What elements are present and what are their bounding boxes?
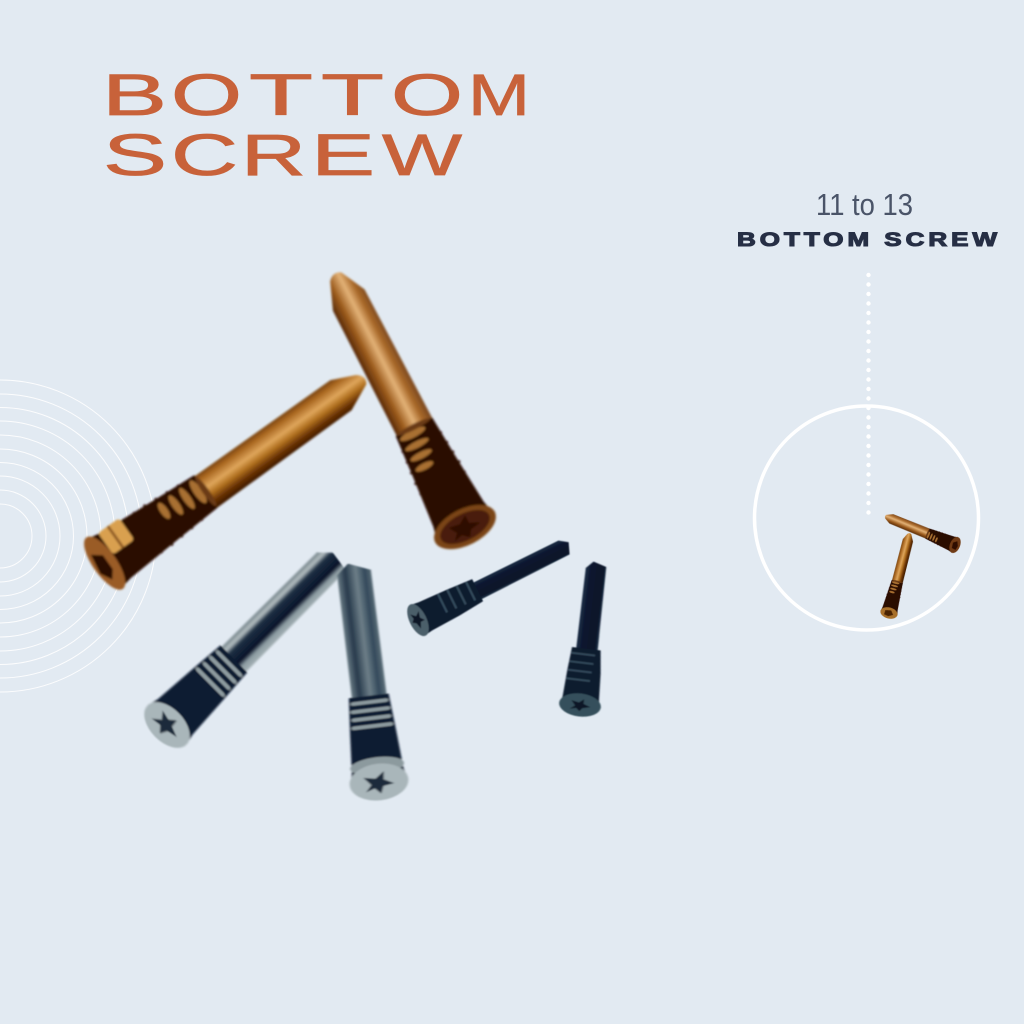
white circle callout xyxy=(754,406,978,630)
title: BOTTOM SCREW: T xyxy=(249,63,313,128)
title: BOTTOM SCREW: W xyxy=(382,123,462,188)
title: BOTTOM SCREW xyxy=(102,63,530,188)
small gold screw, lower xyxy=(879,531,918,621)
title: BOTTOM SCREW: T xyxy=(321,63,384,128)
title: BOTTOM SCREW: B xyxy=(102,63,167,128)
title: BOTTOM SCREW: E xyxy=(311,123,375,188)
title: BOTTOM SCREW: S xyxy=(103,123,167,188)
screw photo: gold screw, lower left xyxy=(77,353,383,596)
title: BOTTOM SCREW: O xyxy=(391,63,463,128)
dotted connector line xyxy=(866,275,871,513)
screw photo: silver screw, centre xyxy=(324,560,410,804)
screw photo: black screw, horizontal xyxy=(403,529,578,639)
title: BOTTOM SCREW: R xyxy=(241,123,306,188)
subtitle: BOTTOM SCREW: BOTTOM SCREW xyxy=(737,229,1001,251)
title: BOTTOM SCREW: C xyxy=(171,123,238,188)
screw photo: gold screw, upper right xyxy=(306,258,503,558)
decorative concentric rings xyxy=(0,380,156,692)
title: BOTTOM SCREW: O xyxy=(171,63,242,128)
screw photo: silver screw, left xyxy=(136,537,356,756)
title: BOTTOM SCREW: M xyxy=(468,63,530,128)
small gold screw, upper xyxy=(882,508,963,555)
screw photo: black screw, upright xyxy=(558,560,618,719)
count label: 11 to 13: 11 to 13 xyxy=(816,187,913,222)
